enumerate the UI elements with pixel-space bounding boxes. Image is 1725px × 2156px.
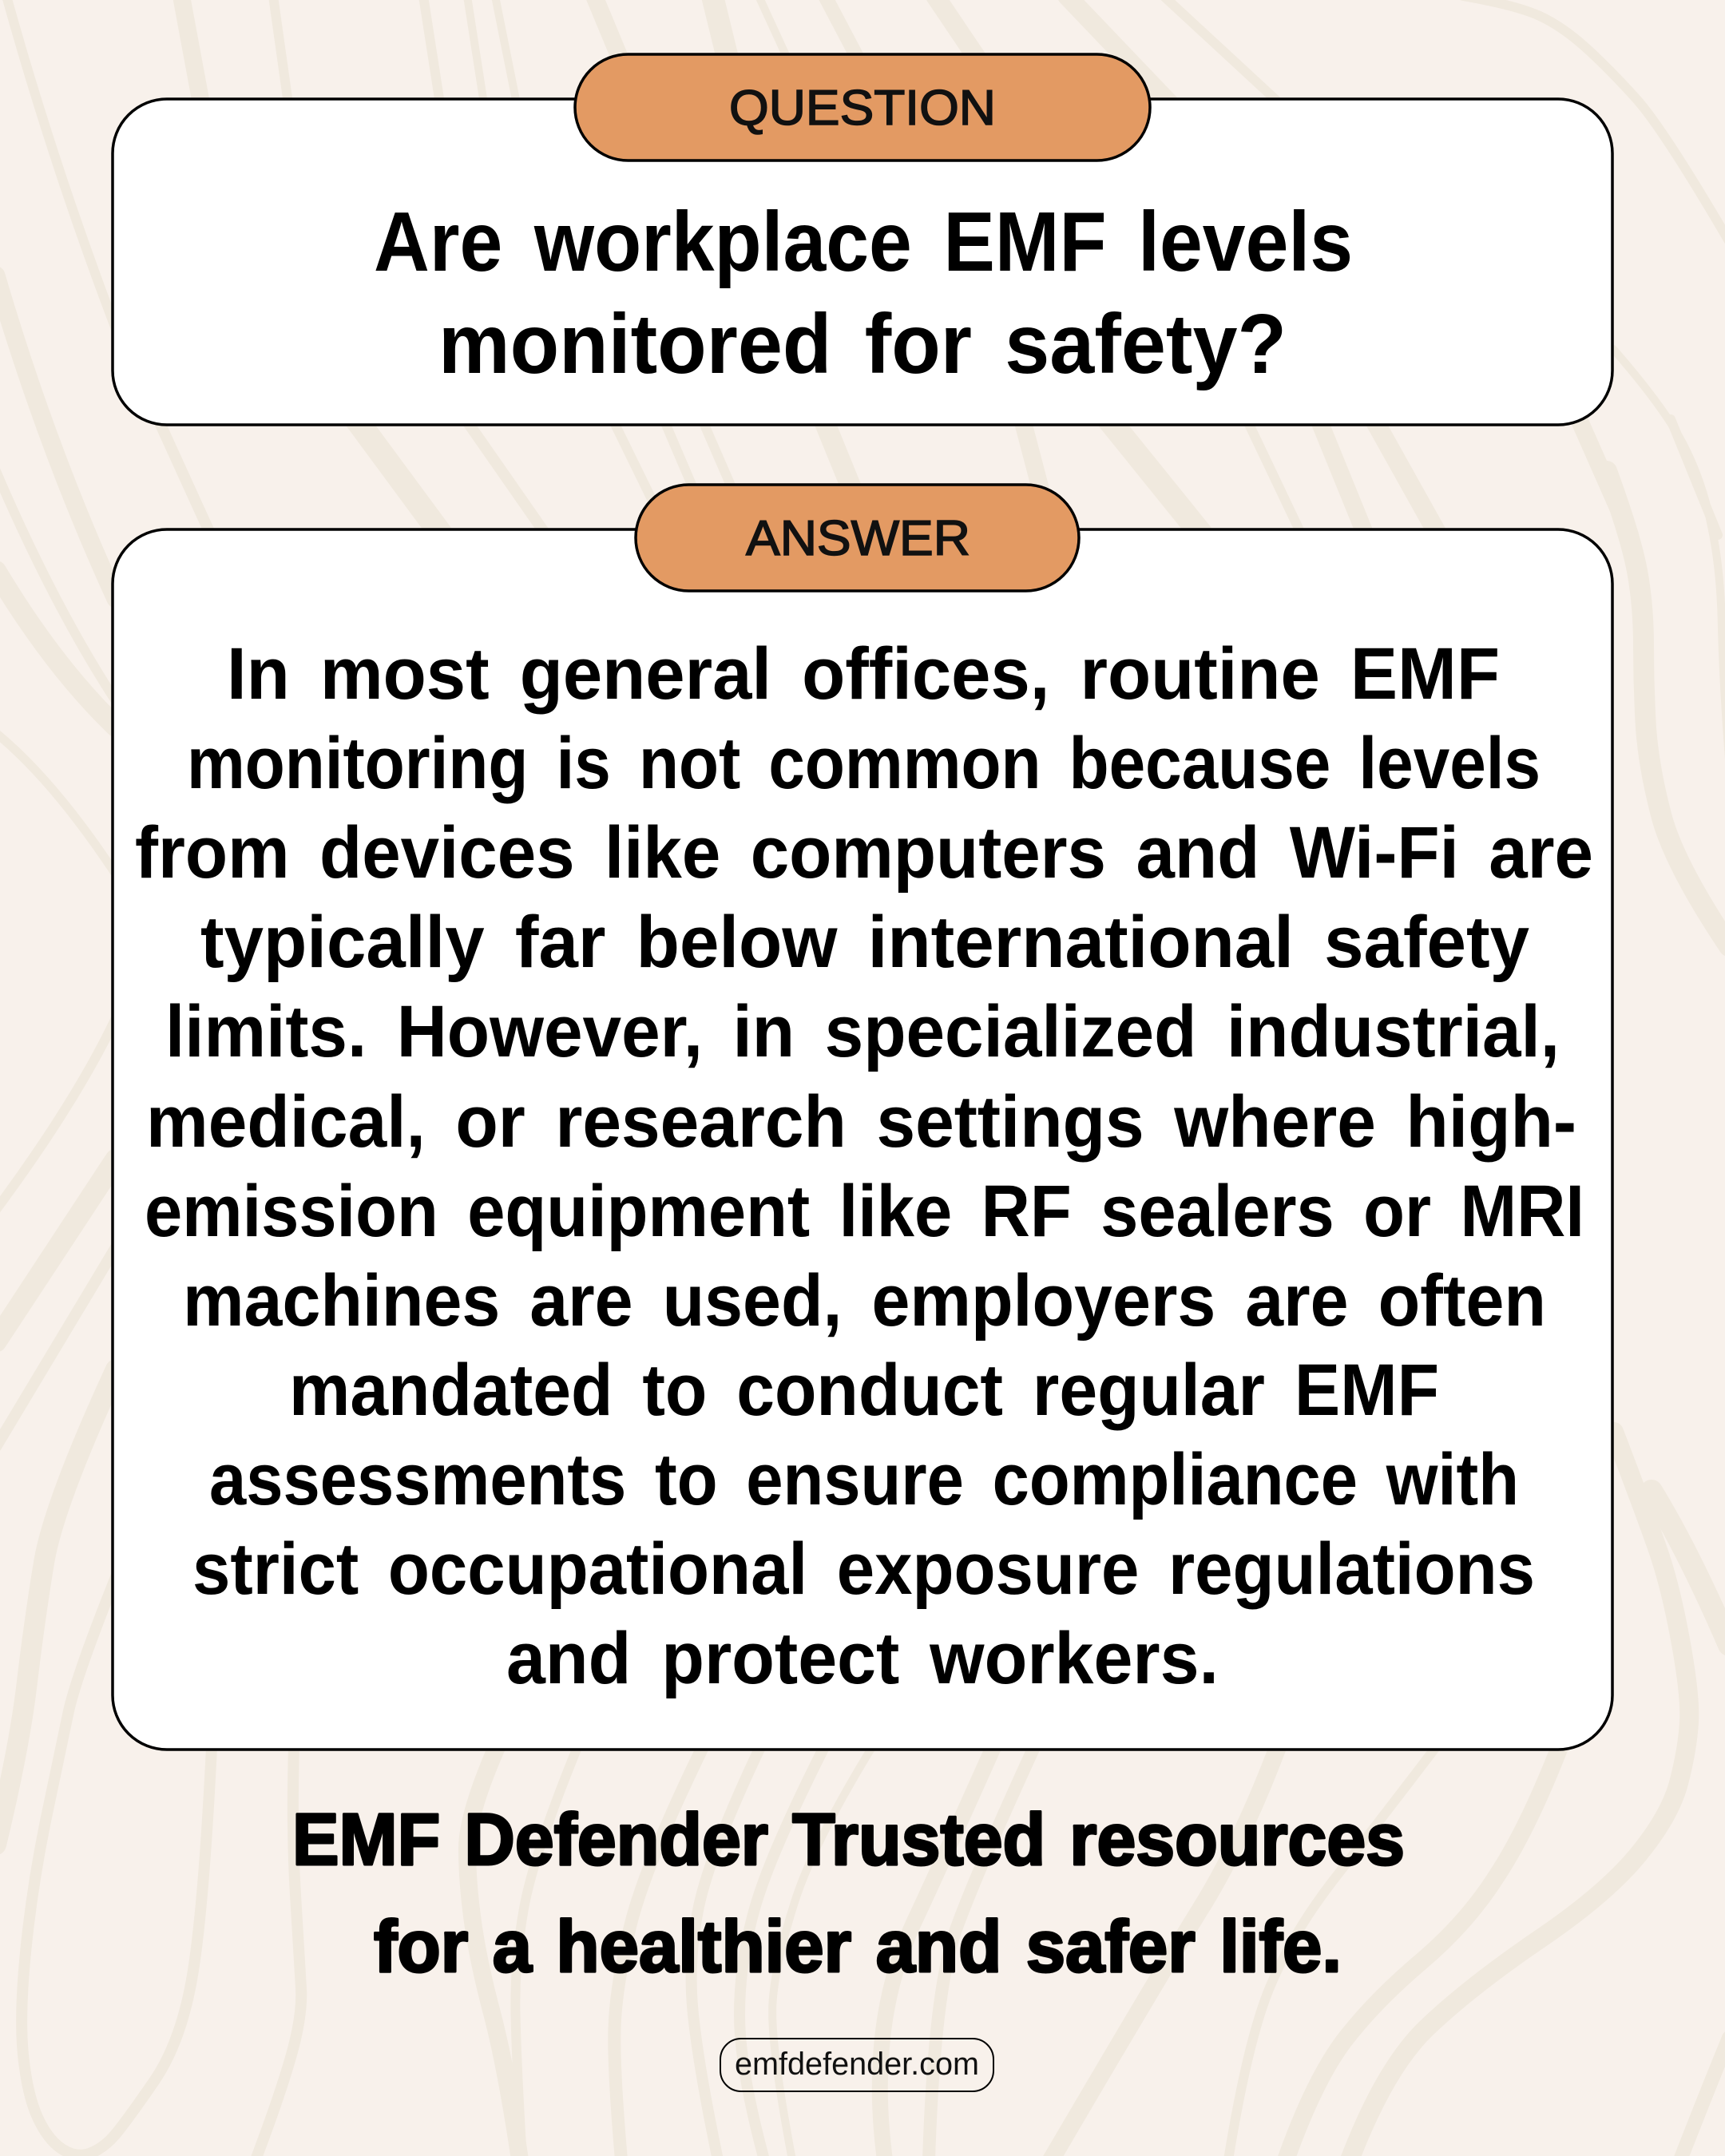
- answer text block: typically far below international safety: [200, 902, 1529, 983]
- answer text block: monitoring is not common because levels: [187, 723, 1541, 804]
- question badge: QUESTION: [729, 81, 996, 136]
- answer text block: In most general offices, routine EMF: [227, 633, 1500, 715]
- answer text block: from devices like computers and Wi-Fi are: [135, 812, 1593, 894]
- website link pill: [720, 2039, 993, 2091]
- answer text block: mandated to conduct regular EMF: [289, 1349, 1439, 1431]
- footer tagline: for a healthier and safer life.: [374, 1906, 1342, 1988]
- footer tagline: [292, 1799, 1405, 1988]
- question badge: [575, 54, 1150, 161]
- answer text block: medical, or research settings where high-: [146, 1081, 1576, 1163]
- answer text block: and protect workers.: [506, 1618, 1219, 1699]
- answer text block: assessments to ensure compliance with: [209, 1439, 1519, 1520]
- answer text block: [135, 633, 1593, 1699]
- footer tagline: EMF Defender Trusted resources: [292, 1799, 1405, 1881]
- answer badge: [636, 485, 1079, 591]
- website link pill: emfdefender.com: [735, 2047, 979, 2082]
- answer badge: ANSWER: [746, 511, 970, 566]
- answer card: [113, 529, 1612, 1750]
- answer text block: limits. However, in specialized industrial,: [165, 991, 1560, 1072]
- answer text block: emission equipment like RF sealers or MRI: [145, 1171, 1584, 1252]
- answer text block: strict occupational exposure regulations: [192, 1528, 1535, 1610]
- question heading: [374, 195, 1353, 391]
- question card: [113, 99, 1612, 425]
- answer text block: machines are used, employers are often: [183, 1260, 1546, 1342]
- panel: question: [113, 54, 1612, 425]
- question heading: monitored for safety?: [438, 297, 1287, 391]
- panel: answer: [113, 485, 1612, 1750]
- question heading: Are workplace EMF levels: [374, 195, 1353, 289]
